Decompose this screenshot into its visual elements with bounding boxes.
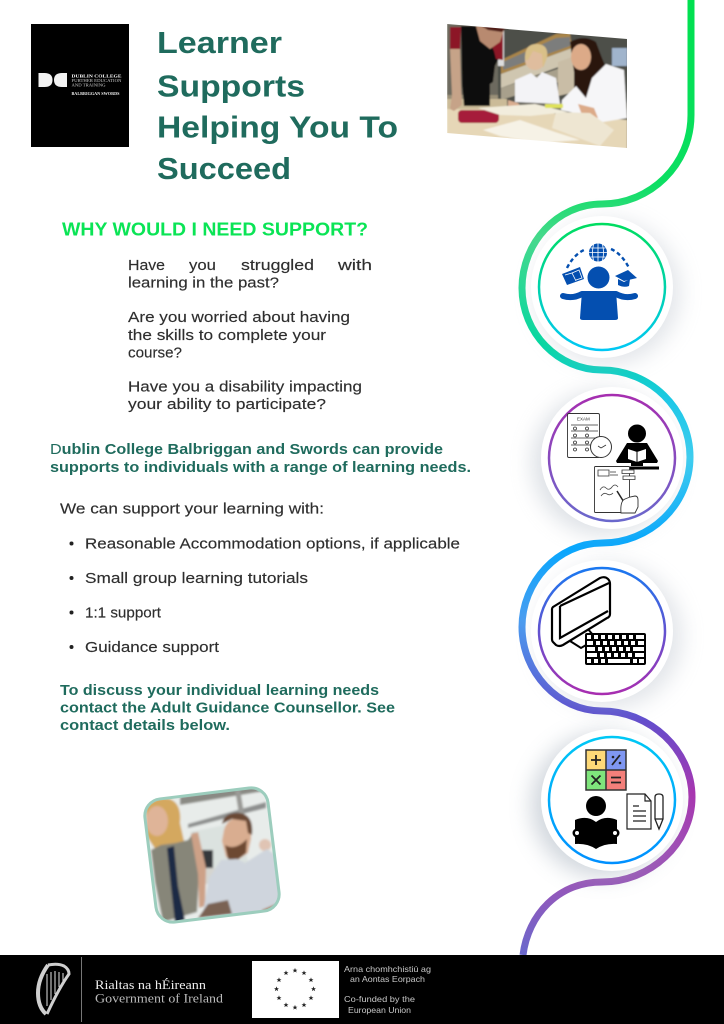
photo detail: left student [461, 26, 501, 106]
text block: questions: you [189, 257, 216, 274]
title: Helping You To [157, 110, 398, 144]
text block: questions [128, 257, 372, 413]
photo: two colleagues at a computer [143, 786, 281, 924]
photo detail: right student [569, 38, 605, 98]
title: Succeed [157, 151, 291, 186]
circle 3: computer and keyboard [531, 560, 682, 708]
circle 4: maths and reading [531, 729, 683, 877]
logo: Dublin College [31, 24, 129, 147]
footer band: Government of Ireland [95, 990, 224, 1006]
text block: contact note: contact the Adult Guidance Counsellor. See [60, 700, 395, 716]
circle 2: exam and study [532, 387, 683, 535]
text block: questions: Are you worried about having [128, 309, 350, 326]
text block: questions: learning in the past? [128, 274, 279, 292]
text block: college statement: supports to individuals with a range of learning needs. [50, 460, 471, 476]
text block: questions: struggled [241, 257, 314, 274]
text block: college statement: Dublin College Balbriggan and Swords can provide [50, 442, 443, 458]
logo: Dublin College: BALBRIGGAN SWORDS [72, 91, 120, 96]
ribbon: winding timeline [522, 0, 692, 955]
logo: Dublin College: DUBLIN COLLEGE [72, 74, 122, 78]
footer band: Rialtas na hÉireann [95, 977, 207, 992]
icon: EU flag [252, 961, 339, 1018]
text block: contact note: contact details below. [60, 718, 230, 734]
text block: co-funding note: European Union [348, 1005, 411, 1015]
text block: co-funding note: Co-funded by the [344, 994, 415, 1004]
photo detail: middle student [525, 50, 545, 70]
text block: contact note [60, 683, 395, 734]
text block: questions: Have you a disability impacting [128, 378, 362, 396]
icon: monitor and keyboard [552, 577, 646, 665]
logo: Dublin College: AND TRAINING [72, 82, 106, 88]
text block: co-funding note [344, 964, 431, 1015]
logo: Dublin College: FURTHER EDUCATION [72, 78, 122, 83]
title [157, 25, 398, 186]
text block: contact note: To discuss your individual learning needs [60, 683, 379, 699]
text block: questions: the skills to complete your [128, 327, 326, 344]
text block: co-funding note: an Aontas Eorpach [350, 974, 425, 984]
circle 1: learner juggling subjects [531, 216, 680, 364]
title: Supports [157, 68, 305, 104]
icon: person with globe, book and cap [562, 244, 637, 320]
photo: students in library [447, 20, 628, 150]
icon: exam paper, clock, student, writing hand [568, 414, 659, 513]
icon: calculator grid, reader, document and pen [572, 750, 663, 849]
title: Learner [157, 25, 282, 60]
text block: support list: We can support your learning with: [60, 500, 324, 518]
text block: college statement [50, 442, 471, 476]
text block: support list: Guidance support [85, 639, 220, 656]
heading: why would I need support: WHY WOULD I NEED SUPPORT? [62, 219, 368, 240]
text block: questions: Have [128, 257, 165, 274]
text block: questions: course? [128, 344, 182, 362]
icon: Irish harp [38, 964, 69, 1014]
icon: exam paper, clock, student, writing hand: EXAM [577, 416, 590, 422]
footer band [0, 955, 724, 1024]
text block: support list: Small group learning tutorials [85, 570, 308, 587]
text block: support list: 1:1 support [85, 604, 162, 622]
text block: questions: your ability to participate? [128, 396, 326, 413]
text block: co-funding note: Arna chomhchistiú ag [344, 964, 431, 974]
text block: support list [60, 500, 460, 656]
text block: questions: with [337, 257, 372, 274]
text block: support list: Reasonable Accommodation options, if applicable [85, 536, 460, 552]
